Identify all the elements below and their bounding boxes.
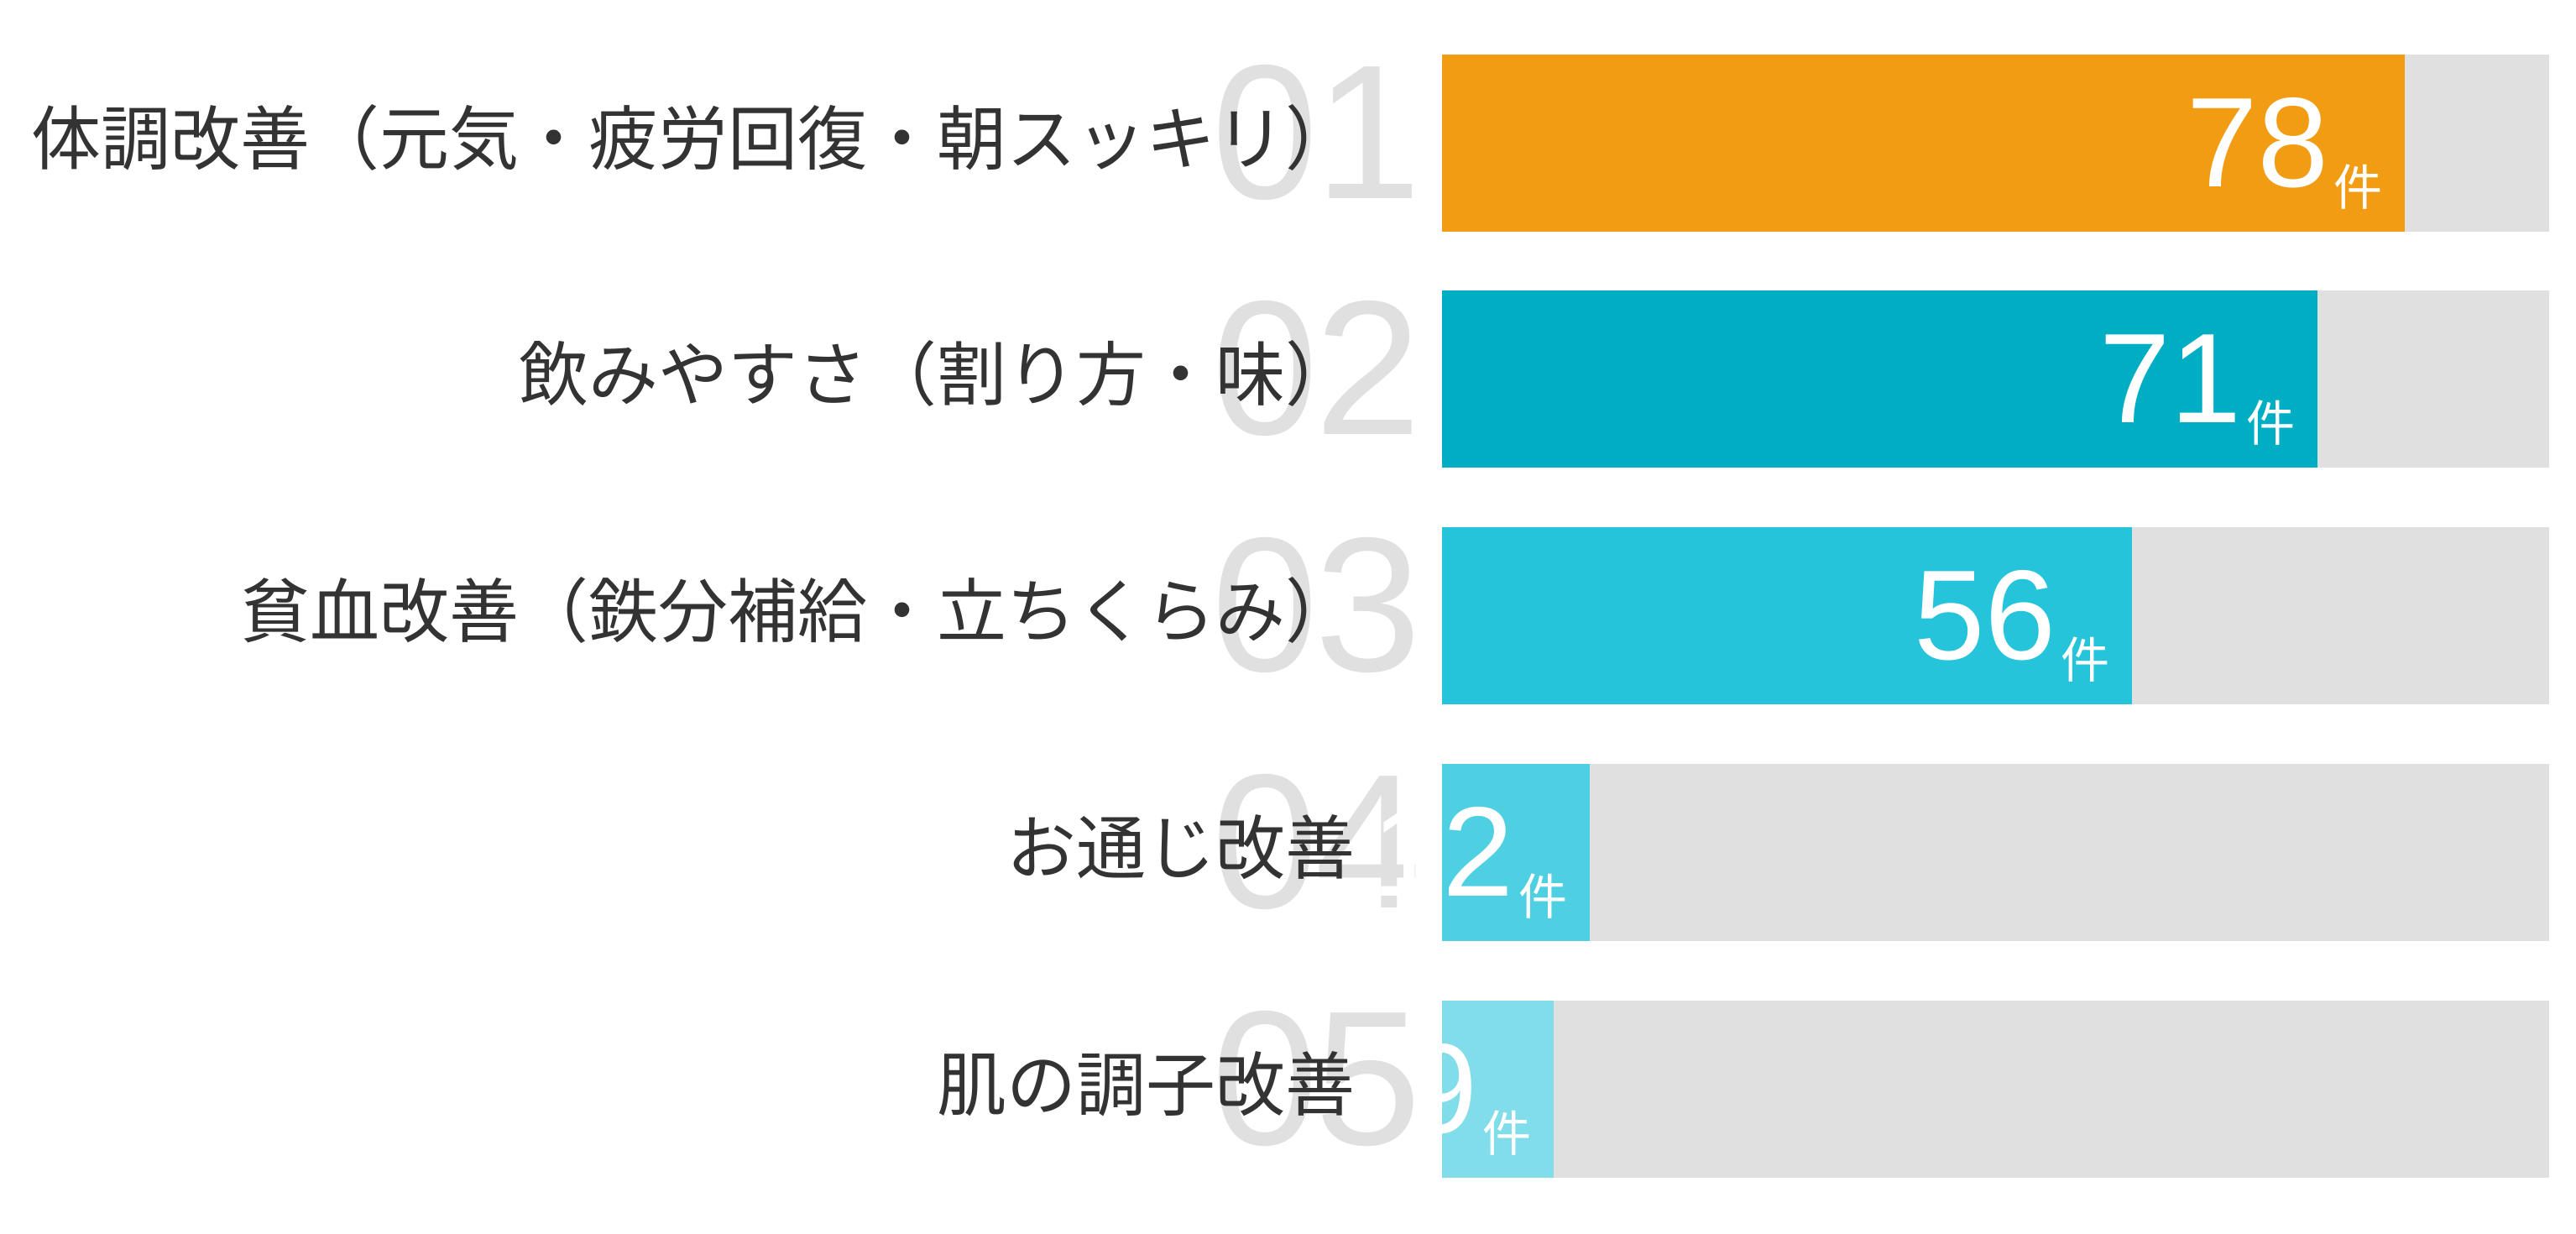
value 78: 78件 [2187,71,2382,216]
label 2: 飲みやすさ（割り方・味） [519,337,1355,415]
value 9: 9件 [1406,1017,1531,1162]
bar 5 [1442,1001,2549,1178]
bar 4 [1442,764,2549,941]
value 12: 12件 [1372,781,1567,925]
bar 2 [1442,290,2549,468]
bar 3 [1442,527,2549,704]
rank number 03: 03 [1211,499,1418,712]
label 3: 貧血改善（鉄分補給・立ちくらみ） [240,573,1355,651]
row 3 [240,499,2549,712]
label 5: 肌の調子改善 [937,1047,1355,1125]
value 56: 56件 [1914,544,2109,688]
label 4: お通じ改善 [1006,810,1355,888]
bar 1 [1442,55,2549,232]
rank number 01: 01 [1211,26,1418,239]
rank number 05: 05 [1211,972,1418,1185]
row 4 [1006,735,2549,949]
rank number 04: 04 [1211,735,1418,949]
label 1: 体調改善（元気・疲労回復・朝スッキリ） [31,101,1355,179]
row 2 [519,262,2549,475]
value 71: 71件 [2099,307,2295,452]
row 5 [937,972,2549,1185]
row 1 [31,26,2549,239]
rank number 02: 02 [1211,262,1418,475]
